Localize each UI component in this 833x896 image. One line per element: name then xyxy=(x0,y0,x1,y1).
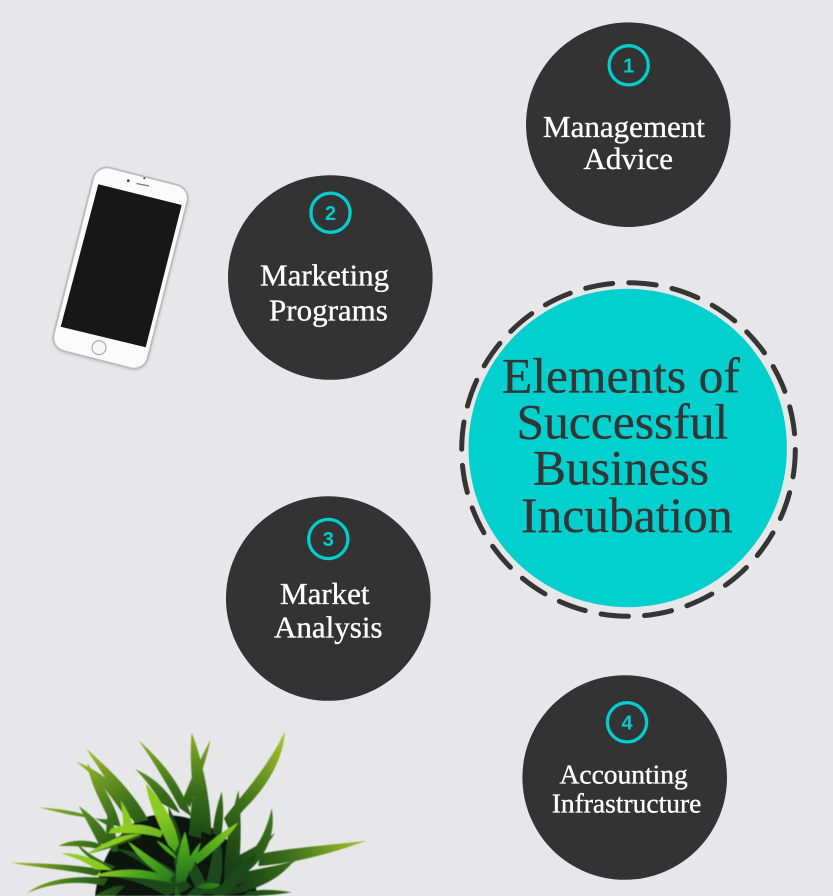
dashed ring xyxy=(462,283,795,616)
central circle: title xyxy=(462,283,795,616)
element 2: marketing programs xyxy=(228,175,433,380)
element 4: accounting infrastructure xyxy=(522,675,727,880)
number badge 1: 1 xyxy=(623,56,634,78)
label: Infrastructure xyxy=(552,787,701,818)
title text: Elements of xyxy=(502,348,740,404)
number badge 3: 3 xyxy=(323,529,334,551)
dark disc xyxy=(226,496,431,701)
number badge 4: 4 xyxy=(621,712,633,734)
label: Analysis xyxy=(274,610,382,645)
phone photo xyxy=(50,164,191,373)
dark disc xyxy=(522,675,727,880)
title text: Successful xyxy=(516,394,728,450)
label: Market xyxy=(280,576,370,611)
label: Accounting xyxy=(560,758,688,789)
number badge 2 xyxy=(311,193,350,232)
number badge 2: 2 xyxy=(325,203,336,225)
number badge 1 xyxy=(609,46,648,85)
potted plant photo xyxy=(11,731,367,896)
label: Marketing xyxy=(260,258,389,293)
label: Management xyxy=(543,109,705,144)
label: Programs xyxy=(269,293,388,328)
element 3: market analysis xyxy=(226,496,431,701)
teal disc xyxy=(468,289,787,607)
number badge 4 xyxy=(607,703,647,742)
label: Advice xyxy=(584,141,673,176)
title text: Incubation xyxy=(521,488,733,543)
number badge 3 xyxy=(309,519,348,559)
element 1: management advice xyxy=(526,22,731,227)
dark disc xyxy=(228,175,433,380)
title text: Business xyxy=(533,440,709,496)
inner dark foliage xyxy=(113,807,257,896)
dark disc xyxy=(526,22,731,227)
